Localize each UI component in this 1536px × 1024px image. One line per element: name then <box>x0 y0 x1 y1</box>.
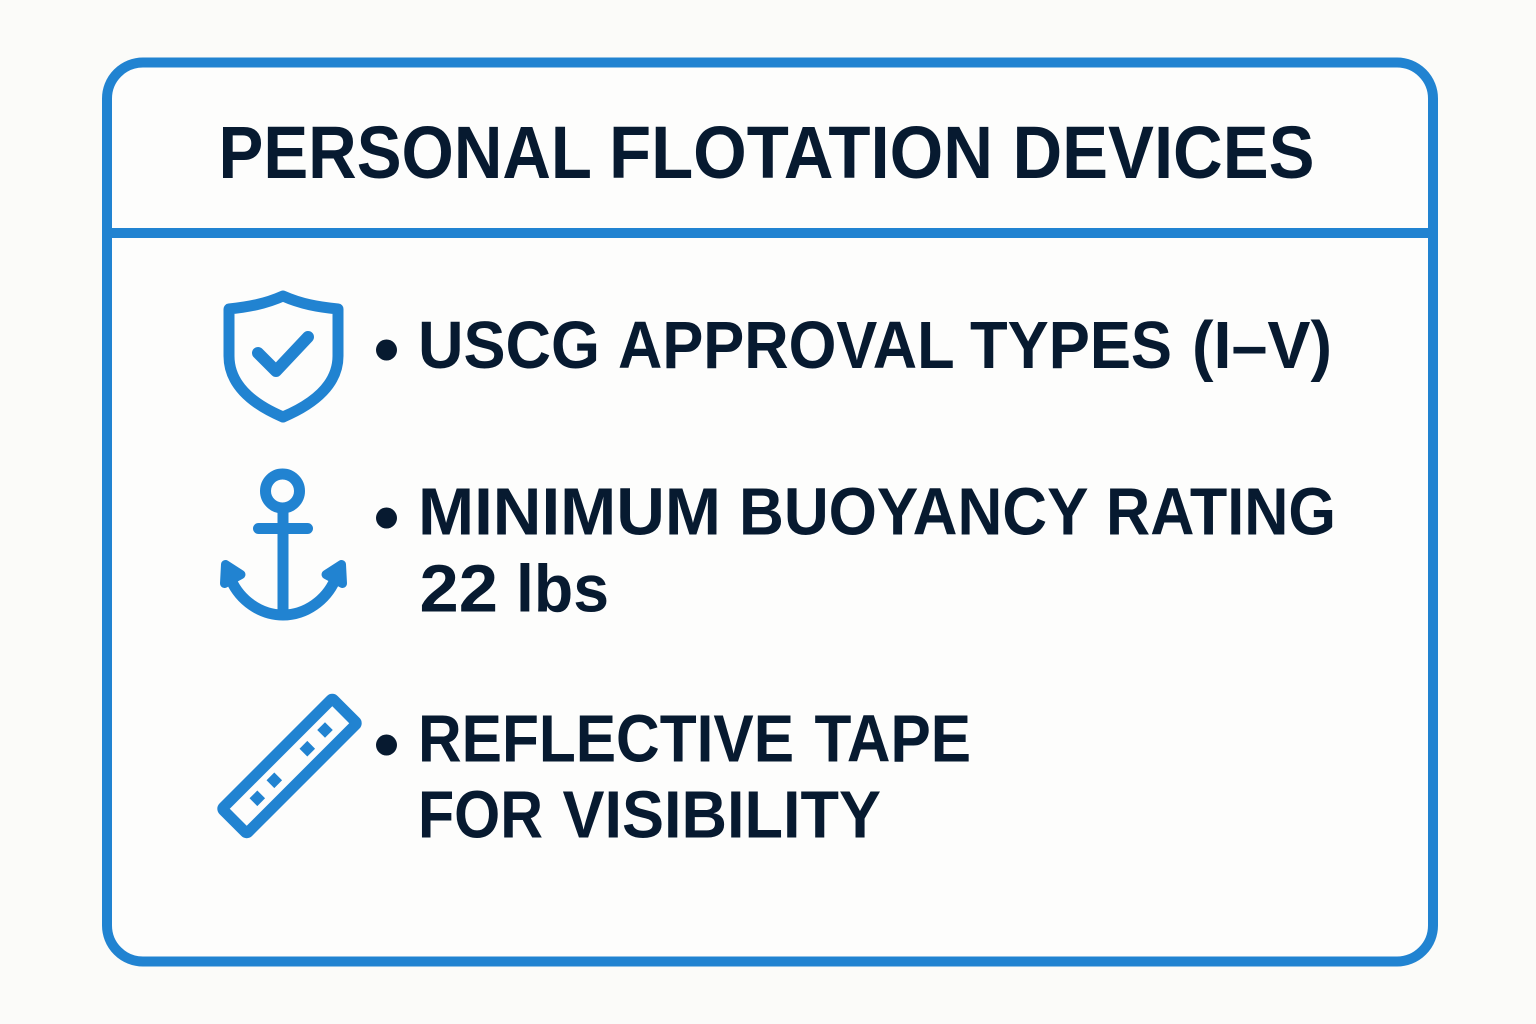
bullet: USCG approval <box>376 340 397 360</box>
text: reflective tape for visibility: TAPE <box>814 702 971 776</box>
text: reflective tape for visibility: REFLECTIVE <box>418 702 794 776</box>
text: USCG approval types: TYPES <box>970 309 1172 383</box>
text: minimum buoyancy rating <box>418 476 1336 626</box>
title: FLOTATION <box>609 111 993 194</box>
text: USCG approval types: APPROVAL <box>618 309 955 383</box>
text: USCG approval types: USCG <box>418 309 600 383</box>
text: USCG approval types: (I–V) <box>1192 309 1332 383</box>
icon: anchor <box>224 474 342 615</box>
bullet: buoyancy <box>376 508 397 528</box>
title: DEVICES <box>1012 111 1314 194</box>
text: reflective tape for visibility: FOR <box>418 778 543 852</box>
text: reflective tape for visibility: VISIBILITY <box>562 778 881 852</box>
text: minimum buoyancy rating: RATING <box>1106 476 1336 550</box>
icon: shield with check <box>229 296 338 417</box>
text: reflective tape for visibility <box>418 702 971 852</box>
panel: main card <box>107 62 1433 962</box>
icon: reflective tape <box>222 698 357 834</box>
bullet: reflective tape <box>376 734 397 756</box>
text: minimum buoyancy rating: lbs <box>516 552 609 626</box>
text: minimum buoyancy rating: BUOYANCY <box>739 476 1088 550</box>
text: minimum buoyancy rating: MINIMUM <box>418 476 721 550</box>
text: USCG approval types <box>418 309 1332 383</box>
title <box>218 111 1314 194</box>
title: PERSONAL <box>218 111 592 194</box>
text: minimum buoyancy rating: 22 <box>420 552 498 626</box>
